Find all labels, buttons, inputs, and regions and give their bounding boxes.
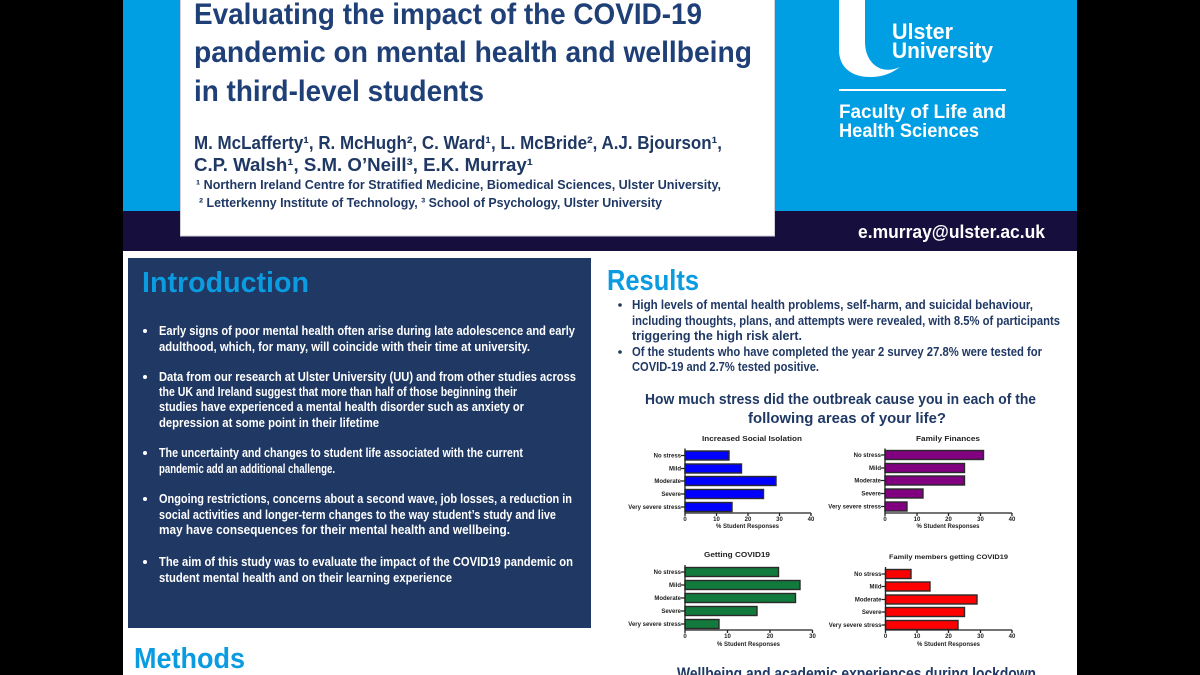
chart question heading [645, 391, 1036, 427]
bullet: aim: The aim of this study was to evaluate the impact of the COVID19 pandemic on [159, 555, 573, 569]
bar chart: increased social isolation [628, 434, 815, 530]
panel: introduction [128, 258, 591, 628]
bullet: uncertainty [143, 446, 524, 476]
title panel [180, 0, 774, 236]
bar chart: increased social isolation: Mild [669, 466, 681, 472]
logo: Ulster University [839, 0, 1006, 142]
header band: dark contact strip [123, 211, 1077, 251]
bar chart: getting COVID19: 10 [724, 634, 731, 640]
header band: blue [123, 0, 1077, 211]
bar chart: increased social isolation: Moderate [654, 479, 682, 485]
bar chart: getting COVID19: % Student Responses [717, 642, 781, 648]
bar chart: getting COVID19: Moderate [654, 596, 682, 602]
bullet: restrictions: social activities and longer-term changes to the way student’s study and live [159, 508, 556, 522]
university name: Ulster [892, 19, 953, 44]
bar chart: getting COVID19: No stress [654, 570, 682, 576]
bar chart: getting COVID19: 0 [683, 634, 687, 640]
heading: introduction: Introduction [142, 267, 309, 299]
faculty name: Faculty of Life and [839, 102, 1006, 123]
bar chart: increased social isolation: 30 [776, 517, 783, 523]
bar chart: getting COVID19: Mild [669, 583, 681, 589]
affiliations [196, 177, 721, 210]
bar chart: family finances: 20 [945, 517, 952, 523]
university name [892, 19, 994, 63]
bar chart: family finances: Family Finances [916, 434, 980, 443]
bullet: aim: student mental health and on their learning experience [159, 571, 452, 585]
bullet: research data: studies have experienced a mental health disorder such as anxiety or [159, 400, 524, 414]
title: in third-level students [194, 75, 484, 108]
results bullets: Of the students who have completed the year 2 survey 27.8% were tested for [632, 345, 1042, 359]
bullet: research data [143, 370, 576, 430]
contact email: e.murray@ulster.ac.uk [858, 222, 1046, 242]
chart question heading: How much stress did the outbreak cause you in each of the [645, 391, 1036, 408]
results bullets: COVID-19 and 2.7% tested positive. [632, 360, 819, 374]
bullet: aim [143, 555, 573, 585]
chart question heading: following areas of your life? [748, 410, 946, 427]
bar chart: family members getting COVID19: 20 [945, 634, 952, 640]
bar chart: family finances: 10 [914, 517, 921, 523]
bar chart: getting COVID19: Getting COVID19 [704, 550, 770, 559]
bullet: early signs: Early signs of poor mental health often arise during late adolescence and early [159, 324, 575, 338]
bar chart: increased social isolation: % Student Responses [716, 524, 780, 530]
bar chart: increased social isolation: Severe [661, 492, 682, 498]
bar chart: getting COVID19 [628, 550, 816, 648]
bar chart: family finances: Moderate [854, 478, 882, 484]
bullet: research data: depression at some point in their lifetime [159, 416, 379, 430]
bullet: research data: Data from our research at Ulster University (UU) and from other studies across [159, 370, 576, 384]
results bullets [618, 298, 1060, 374]
bar chart: family members getting COVID19: 40 [1009, 634, 1016, 640]
faculty name [839, 102, 1006, 142]
bar chart: increased social isolation: No stress [654, 454, 682, 460]
bullet: early signs [143, 324, 575, 354]
bar chart: family finances: % Student Responses [916, 524, 980, 530]
bar chart: increased social isolation: Very severe stress [628, 505, 682, 511]
bar chart: family finances: 40 [1009, 517, 1016, 523]
bar chart: family finances: Severe [861, 492, 882, 498]
bullet: restrictions: may have consequences for their mental health and wellbeing. [159, 523, 510, 537]
bar chart: increased social isolation: 0 [683, 517, 687, 523]
icon: logo swoosh [839, 0, 900, 77]
title [194, 0, 752, 108]
authors: C.P. Walsh¹, S.M. O’Neill³, E.K. Murray¹ [194, 155, 533, 175]
bar chart: family members getting COVID19: 10 [914, 634, 921, 640]
bar chart: increased social isolation: 10 [713, 517, 720, 523]
bar chart: getting COVID19: Severe [661, 609, 682, 615]
bar chart: family members getting COVID19: Very severe stress [829, 623, 882, 629]
bar chart: family members getting COVID19: Mild [870, 584, 882, 590]
heading: methods: Methods [134, 643, 245, 675]
heading: results: Results [607, 265, 699, 297]
title: pandemic on mental health and wellbeing [194, 36, 752, 69]
faculty name: Health Sciences [839, 121, 979, 142]
bar chart: family members getting COVID19: No stress [854, 572, 882, 578]
bullet: uncertainty: The uncertainty and changes to student life associated with the current [159, 446, 524, 460]
affiliations: ² Letterkenny Institute of Technology, ³ School of Psychology, Ulster University [199, 195, 663, 210]
bar chart: family finances: Very severe stress [828, 504, 882, 510]
affiliations: ¹ Northern Ireland Centre for Stratified Medicine, Biomedical Sciences, Ulster University, [196, 177, 721, 192]
bar chart: family finances: 30 [977, 517, 984, 523]
bullet: restrictions [143, 492, 572, 537]
bar chart: increased social isolation: 40 [808, 517, 815, 523]
bullet: research data: the UK and Ireland suggest that more than half of those beginning their [159, 385, 517, 399]
authors: M. McLafferty¹, R. McHugh², C. Ward¹, L. McBride², A.J. Bjourson¹, [194, 133, 722, 153]
bar chart: family members getting COVID19: 0 [884, 634, 888, 640]
bar chart: family finances: 0 [883, 517, 887, 523]
bar chart: family members getting COVID19: 30 [977, 634, 984, 640]
bar chart: increased social isolation: Increased Social Isolation [702, 434, 802, 443]
bar chart: family finances [828, 434, 1016, 530]
bar chart: family members getting COVID19 [829, 554, 1016, 648]
results bullets: including thoughts, plans, and attempts were revealed, with 8.5% of participants [632, 314, 1060, 328]
bar chart: family members getting COVID19: Moderate [855, 598, 882, 604]
university name: University [892, 38, 994, 63]
bar chart: family members getting COVID19: Family members getting COVID19 [889, 554, 1008, 561]
results bullets: triggering the high risk alert. [632, 329, 802, 343]
bar chart: family finances: Mild [869, 466, 881, 472]
bullet: restrictions: Ongoing restrictions, concerns about a second wave, job losses, a reduction in [159, 492, 572, 506]
bar chart: family members getting COVID19: % Student Responses [917, 642, 981, 648]
bullet: uncertainty: pandemic add an additional challenge. [159, 462, 335, 476]
bar chart: getting COVID19: Very severe stress [628, 622, 682, 628]
bar chart: getting COVID19: 20 [767, 634, 774, 640]
results bullets: High levels of mental health problems, self-harm, and suicidal behaviour, [632, 298, 1033, 312]
bar chart: family finances: No stress [854, 453, 882, 459]
bar chart: family members getting COVID19: Severe [862, 610, 882, 616]
bar chart: increased social isolation: 20 [745, 517, 752, 523]
bullet: early signs: adulthood, which, for many, will coincide with their time at university. [159, 340, 530, 354]
authors [194, 133, 722, 175]
bar chart: getting COVID19: 30 [809, 634, 816, 640]
